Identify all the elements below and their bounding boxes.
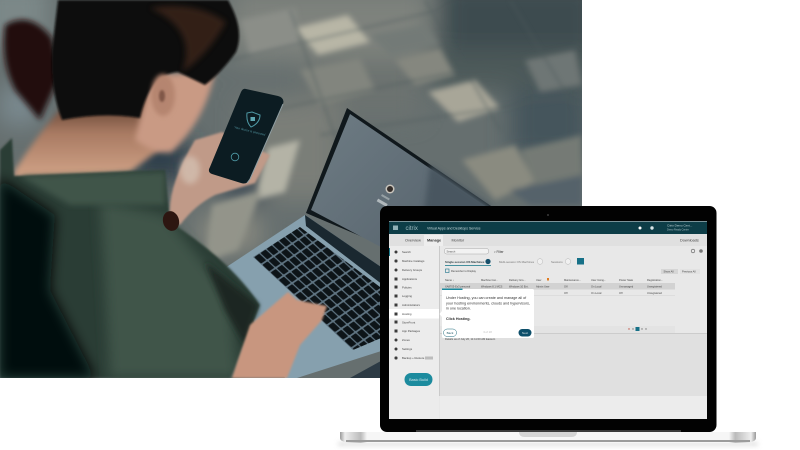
hand on laptop <box>232 292 327 378</box>
hair <box>52 0 239 120</box>
hand holding phone <box>170 132 270 225</box>
sidebar: Settings <box>402 347 413 351</box>
laptop mockup <box>340 206 756 443</box>
sidebar: Administrators <box>402 303 420 307</box>
tooltip popup: Next <box>522 331 528 335</box>
user avatar on laptop <box>377 184 394 207</box>
data table: Windows 8.1 MCS <box>481 284 503 288</box>
data table: User Using... <box>591 278 606 282</box>
table toolbar <box>446 269 700 274</box>
photo: woman using phone and laptop <box>0 0 600 378</box>
sidebar: Machine Catalogs <box>402 259 425 263</box>
back button <box>444 329 456 336</box>
nav tabs <box>389 234 707 246</box>
data table: Off <box>564 284 568 288</box>
data table: Off <box>564 291 568 295</box>
sidebar: App Packages <box>402 329 421 333</box>
shield lock icon <box>247 112 260 127</box>
sidebar: Backup + Restore <box>402 356 425 360</box>
phone <box>209 89 283 184</box>
next button <box>518 329 532 336</box>
header bar: Virtual Apps and Desktops Service <box>427 226 481 230</box>
laptop lid bezel <box>380 206 716 432</box>
pavement background <box>0 0 600 378</box>
app screen <box>389 221 707 419</box>
data table: Unmanaged <box>619 284 634 288</box>
ear <box>151 74 175 116</box>
sidebar: Zones <box>402 338 410 342</box>
data table: On Local <box>591 284 602 288</box>
pagination <box>440 326 675 333</box>
machine tabs <box>445 258 584 266</box>
check icon <box>231 153 239 161</box>
table toolbar: Previous All <box>682 270 696 274</box>
machine tabs: Sessions <box>551 260 563 264</box>
header bar <box>389 222 707 234</box>
sidebar: Logging <box>402 294 412 298</box>
tooltip popup: in one location. <box>446 306 471 310</box>
data table: Maintenance... <box>564 278 581 282</box>
tooltip popup: your hosting environments, clouds and hypervisors, <box>446 302 530 306</box>
sidebar: Search <box>402 250 411 254</box>
table toolbar: Remember to Display <box>451 269 477 273</box>
tooltip popup: Under Hosting, you can create and manage all of <box>446 296 527 300</box>
header bar: Demo Ready Center <box>667 228 689 232</box>
data table: XA8703-Ex3 personal <box>445 284 471 288</box>
data table: Registration... <box>647 278 663 282</box>
data table: Delivery Gro... <box>509 278 526 282</box>
search and filter <box>444 248 703 254</box>
machine tabs: Single-session OS Machines <box>445 260 485 264</box>
sidebar: StoreFront <box>402 320 415 324</box>
tooltip popup: Click Hosting. <box>446 317 471 321</box>
details panel <box>440 333 707 419</box>
hair bun <box>4 20 60 120</box>
keyboard <box>253 227 380 350</box>
new button: Basic Build <box>409 378 428 382</box>
header bar: Citrix Demo Cent... <box>667 224 693 228</box>
search and filter: Search <box>446 250 456 254</box>
data table: Name ↓ <box>445 278 454 282</box>
data table: Machine Cat... <box>481 278 498 282</box>
nav tabs: Downloads <box>680 238 699 242</box>
table toolbar: Show All <box>664 270 674 274</box>
data table: Unregistered <box>647 284 662 288</box>
data table: Unregistered <box>647 291 662 295</box>
sidebar: Hosting <box>402 312 412 316</box>
sidebar: Delivery Groups <box>402 268 423 272</box>
header bar: citrix <box>406 226 418 232</box>
base shadow <box>338 442 758 446</box>
search and filter: ▿ Filter <box>494 250 505 254</box>
nav tabs: Overview <box>405 238 421 242</box>
neck and back skin <box>13 98 162 177</box>
status text: Your device is protected <box>234 125 266 137</box>
nav tabs: Manage <box>427 238 441 242</box>
tooltip popup: Back <box>447 331 454 335</box>
laptop base <box>340 432 756 443</box>
woman <box>0 0 327 378</box>
nav tabs: Monitor <box>452 238 465 242</box>
sidebar <box>389 246 440 419</box>
details panel: Details as of July 26, 11:11:00 AM Eastern <box>445 337 496 341</box>
sidebar: Policies <box>402 286 412 290</box>
new button <box>404 373 432 386</box>
laptop base <box>226 215 380 378</box>
camera <box>547 214 549 216</box>
data table: Power State <box>619 278 634 282</box>
data table: User <box>536 278 542 282</box>
machine tabs: Multi-session OS Machines <box>499 260 535 264</box>
sidebar: Applications <box>402 277 418 281</box>
data table: Off <box>619 291 623 295</box>
data table <box>440 278 675 296</box>
tooltip popup <box>440 288 534 338</box>
laptop in photo <box>226 108 491 378</box>
wristband <box>162 211 180 231</box>
data table: On Local <box>591 291 602 295</box>
face <box>135 72 215 152</box>
laptop lid <box>306 108 491 236</box>
data table: Admin User <box>536 284 550 288</box>
pavement joints <box>249 12 498 136</box>
shirt <box>0 138 260 378</box>
tooltip popup: 3 of 18 <box>483 330 492 334</box>
data table: Windows 10 Ent. <box>509 284 529 288</box>
